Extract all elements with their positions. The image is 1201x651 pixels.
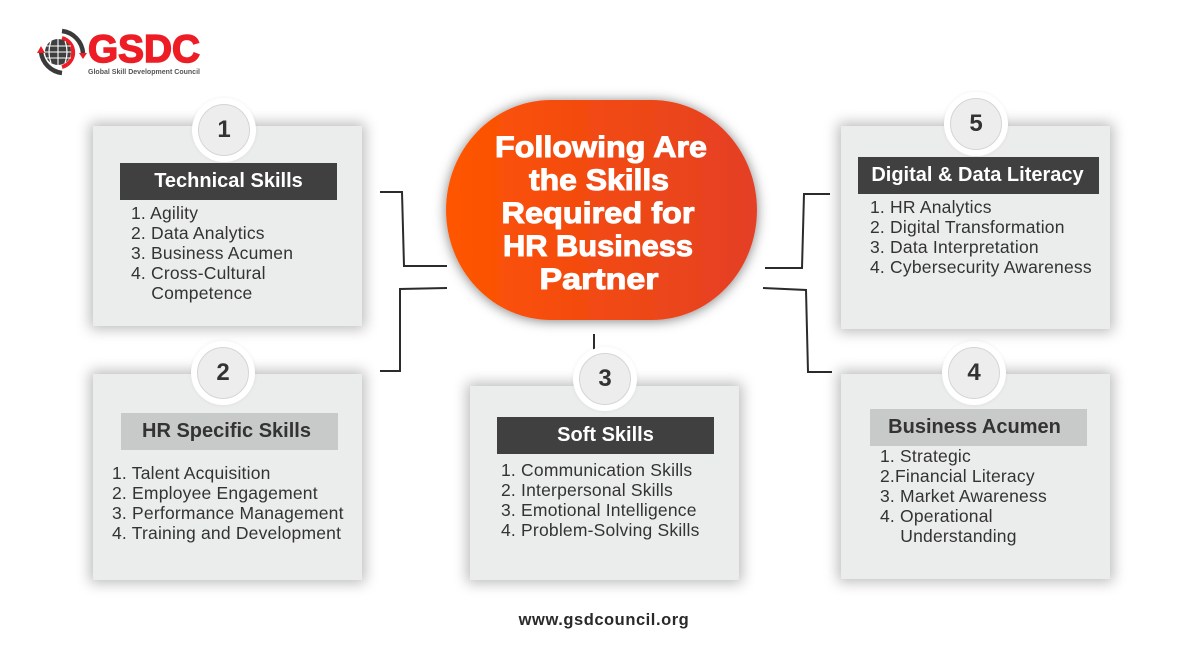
- heading: business acumen: [870, 409, 1087, 446]
- panel: business acumen: [841, 374, 1110, 579]
- badge 2: [197, 347, 249, 399]
- list: business acumen: 1. Strategic 2.Financial Literacy 3. Market Awareness 4. Operational Understanding: [880, 446, 1047, 546]
- connector: technical skills: [380, 192, 447, 266]
- heading: digital and data literacy: [858, 157, 1099, 194]
- heading: soft skills: Soft Skills: [557, 424, 654, 446]
- website footer: www.gsdcouncil.org: [519, 611, 689, 629]
- list: digital and data literacy: 1. HR Analytics 2. Digital Transformation 3. Data Interpretation 4. Cybersecurity Awareness: [870, 197, 1092, 277]
- heading: HR specific skills: HR Specific Skills: [142, 420, 311, 442]
- connector: digital and data literacy: [765, 194, 830, 268]
- list: technical skills: 1. Agility 2. Data Analytics 3. Business Acumen 4. Cross-Cultural Competence: [131, 203, 293, 303]
- badge 1: 1: [217, 116, 231, 143]
- logo tagline: Global Skill Development Council: [88, 69, 200, 76]
- connector: HR specific skills: [380, 288, 447, 371]
- heading: business acumen: Business Acumen: [888, 416, 1061, 438]
- panel: HR specific skills: [93, 374, 362, 580]
- icon: globe with arrows: [37, 31, 87, 73]
- badge 3: [579, 353, 631, 405]
- list: soft skills: 1. Communication Skills 2. Interpersonal Skills 3. Emotional Intelligence 4. Problem-Solving Skills: [501, 460, 700, 540]
- badge 1: [198, 104, 250, 156]
- title text: the Skills: [529, 164, 669, 197]
- title text: Partner: [540, 263, 659, 296]
- heading: technical skills: [120, 163, 337, 200]
- logo: [37, 28, 200, 76]
- panel: soft skills: [470, 386, 739, 580]
- badge 5: [950, 98, 1002, 150]
- badge 4: [948, 347, 1000, 399]
- title text: HR Business: [503, 230, 693, 263]
- logo wordmark: GSDC: [88, 28, 200, 71]
- panel: digital and data literacy: [841, 126, 1110, 329]
- heading: technical skills: Technical Skills: [154, 170, 303, 192]
- title text: Required for: [502, 197, 695, 230]
- heading: digital and data literacy: Digital & Data Literacy: [871, 164, 1084, 186]
- badge 2: 2: [216, 359, 230, 386]
- list: HR specific skills: 1. Talent Acquisition 2. Employee Engagement 3. Performance Management 4. Training and Development: [112, 463, 344, 543]
- panel: technical skills: [93, 126, 362, 326]
- badge 4: 4: [967, 359, 981, 386]
- title text: [495, 131, 707, 296]
- title text: Following Are: [495, 131, 707, 164]
- badge 3: 3: [598, 365, 612, 392]
- connector: business acumen: [763, 288, 832, 372]
- badge 5: 5: [969, 110, 983, 137]
- connector: soft skills: [593, 334, 595, 351]
- heading: soft skills: [497, 417, 714, 454]
- heading: HR specific skills: [121, 413, 338, 450]
